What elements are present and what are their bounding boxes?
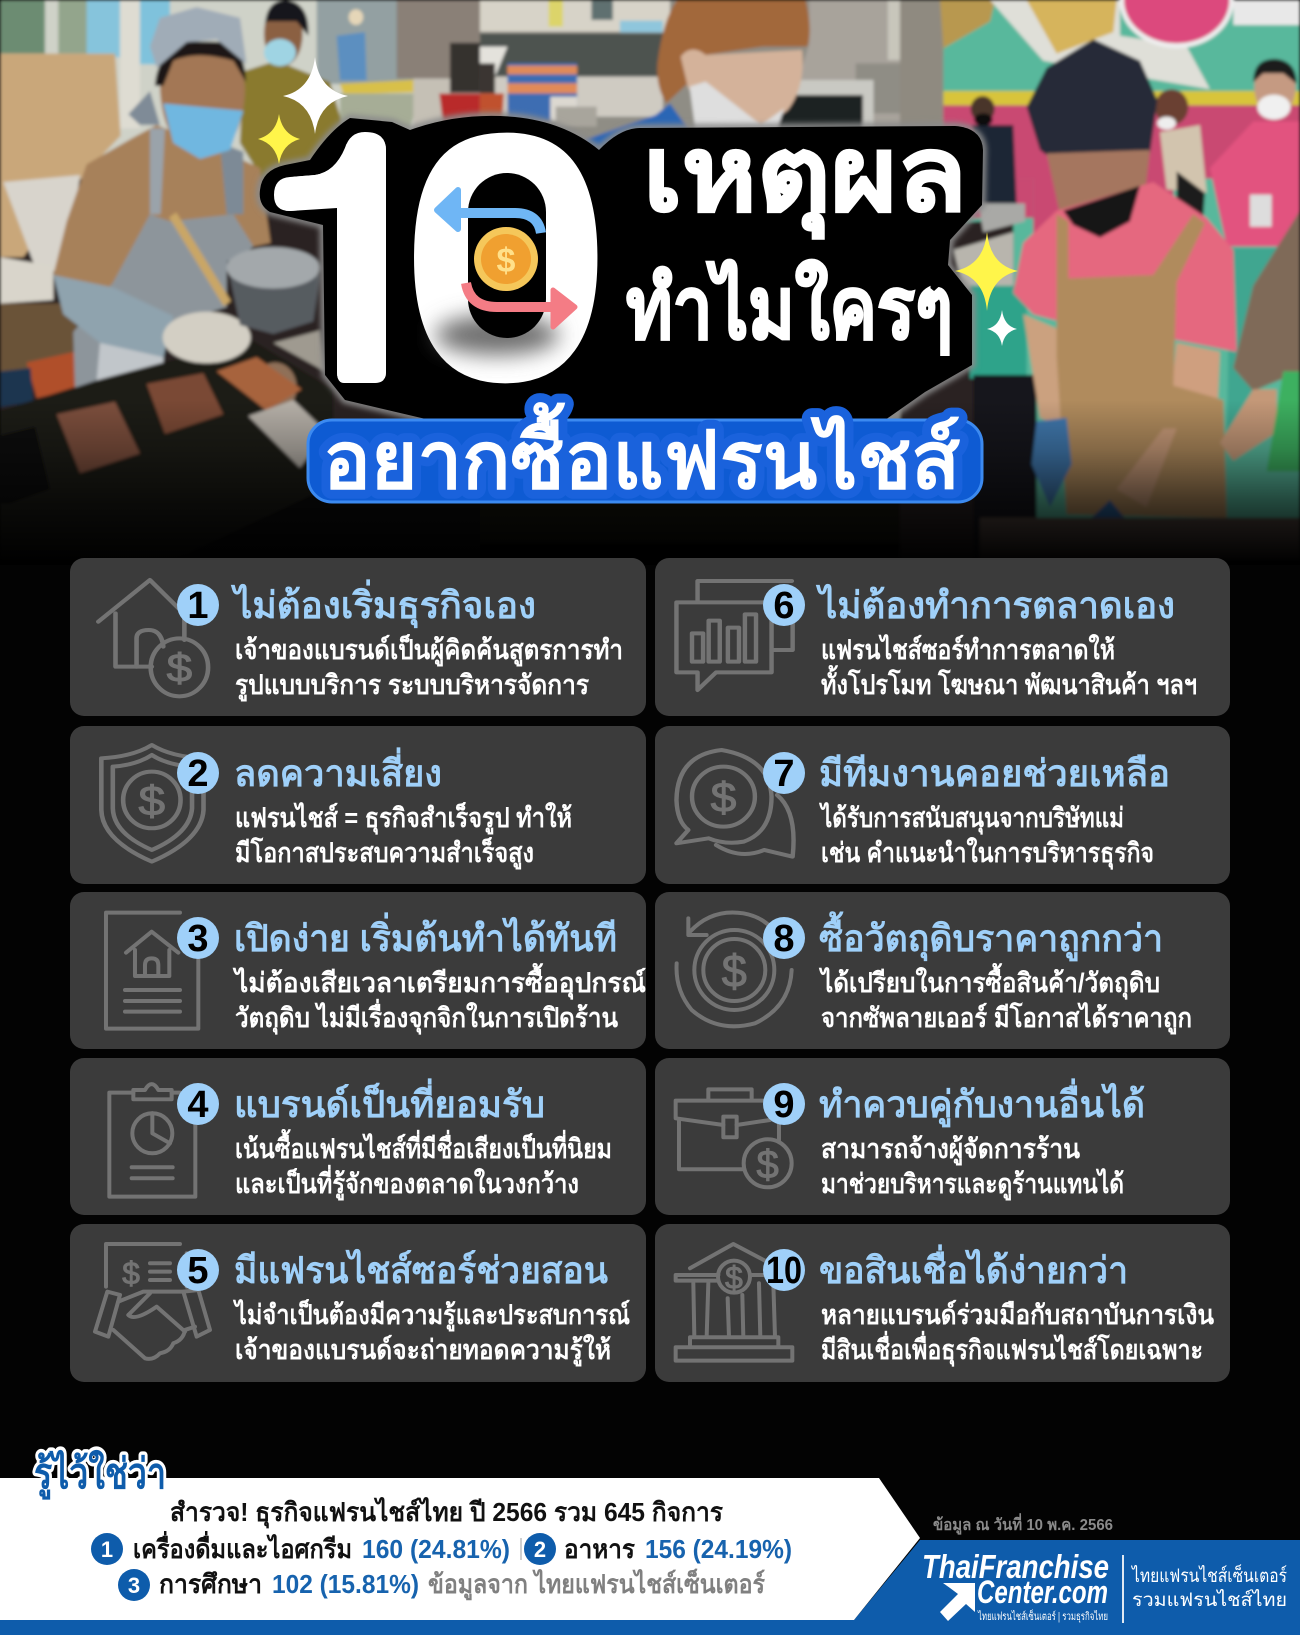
icon: shield with coin xyxy=(101,745,204,862)
body text xyxy=(819,802,1154,870)
heading: แบรนด์เป็นที่ยอมรับ xyxy=(234,1078,545,1125)
body text: ไม่จำเป็นต้องมีความรู้และประสบการณ์ xyxy=(232,1297,630,1332)
hero photo collage xyxy=(0,0,1300,560)
ranking 1: 1 xyxy=(101,1537,113,1562)
body text: ไม่ต้องเสียเวลาเตรียมการซื้ออุปกรณ์ xyxy=(232,962,646,1000)
body text xyxy=(821,634,1197,700)
ranking 1: เครื่องดื่มและไอศกรีม xyxy=(133,1530,352,1564)
body text: วัตถุดิบ ไม่มีเรื่องจุกจิกในการเปิดร้าน xyxy=(235,998,618,1035)
number badge 6 xyxy=(763,584,805,627)
icon: briefcase with coin: $ xyxy=(757,1143,779,1187)
icon: shield with coin: $ xyxy=(139,777,165,824)
icon: bank building xyxy=(676,1244,792,1361)
sparkle: yellow left xyxy=(258,114,300,164)
ranking 1 xyxy=(91,1530,510,1565)
number badge 4: 4 xyxy=(187,1084,209,1126)
logo tagline: รวมแฟรนไชส์ไทย xyxy=(1132,1589,1287,1611)
digit 0: 0 xyxy=(405,68,607,448)
panel: reason 5 xyxy=(70,1224,646,1382)
icon: house with coin: $ xyxy=(167,646,192,691)
body text xyxy=(818,962,1192,1035)
number badge 1 xyxy=(177,584,219,627)
footer blue band xyxy=(0,1540,1300,1635)
heading: ไม่ต้องเริ่มธุรกิจเอง xyxy=(230,579,536,629)
heading: มีทีมงานคอยช่วยเหลือ xyxy=(819,753,1170,794)
number badge 10: 10 xyxy=(766,1250,802,1292)
logo: ไทยแฟรนไชส์เซ็นเตอร์ | รวมธุรกิจไทย xyxy=(977,1609,1108,1623)
heading: รู้ไว้ใช่ว่า: รู้ไว้ใช่ว่า xyxy=(34,1449,166,1500)
photo: right man in pink shirt xyxy=(900,0,1300,560)
body text: แฟรนไชส์ = ธุรกิจสำเร็จรูป ทำให้ xyxy=(235,800,572,835)
body text xyxy=(821,1299,1214,1367)
sparkle: yellow right xyxy=(955,232,1018,311)
logo tagline xyxy=(1130,1563,1287,1611)
body text: เช่น คำแนะนำในการบริหารธุรกิจ xyxy=(821,837,1154,870)
title block xyxy=(254,108,990,418)
footer white panel xyxy=(0,1449,920,1620)
body text: ได้รับการสนับสนุนจากบริษัทแม่ xyxy=(819,802,1124,835)
panel: reason 3 xyxy=(70,892,646,1049)
icon: clipboard with pie chart xyxy=(109,1084,195,1197)
number badge 6: 6 xyxy=(773,585,795,627)
body text: ทั้งโปรโมท โฆษณา พัฒนาสินค้า ฯลฯ xyxy=(821,664,1197,700)
data date note: ข้อมูล ณ วันที่ 10 พ.ค. 2566 xyxy=(933,1513,1113,1536)
icon: red arrow xyxy=(466,283,575,327)
logo xyxy=(922,1548,1109,1623)
number badge 5: 5 xyxy=(187,1250,209,1292)
logo arrow xyxy=(940,1583,975,1621)
body text: รูปแบบบริการ ระบบบริหารจัดการ xyxy=(235,670,589,702)
blue banner: อยากซื้อแฟรนไชส์: อยากซื้อแฟรนไชส์ xyxy=(323,402,960,505)
heading: เหตุผล: เหตุผล xyxy=(643,117,967,239)
number badge 7 xyxy=(763,752,805,795)
body text: สามารถจ้างผู้จัดการร้าน xyxy=(821,1134,1080,1166)
icon: speech bubble with coin: $ xyxy=(711,775,736,821)
digit 1: 1 xyxy=(262,71,451,451)
heading: ทำไมใครๆ: ทำไมใครๆ xyxy=(626,259,953,357)
body text xyxy=(235,800,572,870)
body text xyxy=(232,962,646,1035)
panel: reason 10 xyxy=(655,1224,1230,1382)
icon: briefcase with coin xyxy=(676,1089,792,1187)
heading: ซื้อวัตถุดิบราคาถูกกว่า xyxy=(819,911,1163,962)
sparkle: large white xyxy=(283,57,348,134)
heading: ลดความเสี่ยง xyxy=(234,747,442,794)
digit 1 xyxy=(274,132,386,383)
ranking 3 and source: การศึกษา xyxy=(159,1569,262,1599)
number badge 8 xyxy=(763,917,805,960)
ranking 2: อาหาร xyxy=(564,1534,635,1564)
body text: เจ้าของแบรนด์จะถ่ายทอดความรู้ให้ xyxy=(235,1334,611,1367)
body text xyxy=(232,1297,630,1367)
body text: เน้นซื้อแฟรนไชส์ที่มีชื่อเสียงเป็นที่นิยม xyxy=(235,1128,612,1164)
ranking 1: 160 (24.81%) xyxy=(362,1534,510,1564)
heading: เปิดง่าย เริ่มต้นทำได้ทันที xyxy=(234,912,617,959)
ranking 3 and source: 102 (15.81%) xyxy=(272,1569,419,1599)
ranking 2: 2 xyxy=(534,1537,546,1562)
number badge 9 xyxy=(763,1083,805,1126)
number badge 8: 8 xyxy=(773,918,795,960)
icon: gold coin: $ xyxy=(497,242,516,280)
body text: มีโอกาสประสบความสำเร็จสูง xyxy=(235,835,534,870)
heading: มีแฟรนไชส์ซอร์ช่วยสอน xyxy=(234,1248,608,1291)
icon: chat chart xyxy=(676,581,793,690)
body text: ได้เปรียบในการซื้อสินค้า/วัตถุดิบ xyxy=(818,962,1160,1000)
hero fade to black xyxy=(0,400,1300,565)
body text: แฟรนไชส์ซอร์ทำการตลาดให้ xyxy=(821,634,1115,665)
panel: reason 8 xyxy=(655,892,1230,1049)
number badge 3 xyxy=(177,917,219,960)
number badge 4 xyxy=(177,1083,219,1126)
body text: หลายแบรนด์ร่วมมือกับสถาบันการเงิน xyxy=(821,1299,1214,1330)
icon: handshake and bill xyxy=(95,1244,210,1359)
icon: speech bubble with coin xyxy=(676,750,794,857)
body text: จากซัพลายเออร์ มีโอกาสได้ราคาถูก xyxy=(821,1001,1192,1035)
number badge 3: 3 xyxy=(187,918,209,960)
icon: bank building: $ xyxy=(725,1259,743,1295)
icon: house with coin xyxy=(98,580,208,696)
photo: middle woman and shop xyxy=(420,0,980,543)
survey headline: สำรวจ! ธุรกิจแฟรนไชส์ไทย ปี 2566 รวม 645 กิจการ xyxy=(170,1496,723,1529)
number badge 9: 9 xyxy=(773,1084,795,1126)
ranking 3 and source: ข้อมูลจาก ไทยแฟรนไชส์เซ็นเตอร์ xyxy=(428,1568,765,1601)
panel: reason 2 xyxy=(70,726,646,884)
logo: ThaiFranchise xyxy=(922,1548,1109,1585)
body text: มีสินเชื่อเพื่อธุรกิจแฟรนไชส์โดยเฉพาะ xyxy=(821,1330,1203,1367)
heading: ขอสินเชื่อได้ง่ายกว่า xyxy=(819,1244,1128,1291)
body text xyxy=(235,632,623,702)
panel: reason 6 xyxy=(655,558,1230,716)
icon: document with house xyxy=(106,913,198,1029)
body text xyxy=(235,1128,612,1201)
body text: มาช่วยบริหารและดูร้านแทนได้ xyxy=(821,1168,1124,1201)
icon: circular arrow coin xyxy=(677,912,792,1026)
ranking 3 and source: 3 xyxy=(128,1573,140,1598)
heading: ไม่ต้องทำการตลาดเอง xyxy=(815,583,1175,626)
body text xyxy=(821,1134,1124,1201)
ranking 2: 156 (24.19%) xyxy=(645,1534,792,1564)
icon: blue arrow xyxy=(437,190,541,233)
icon: circular arrow coin: $ xyxy=(722,946,747,997)
logo divider xyxy=(1122,1555,1124,1623)
body text: เจ้าของแบรนด์เป็นผู้คิดค้นสูตรการทำ xyxy=(235,632,623,667)
number badge 7: 7 xyxy=(773,753,795,795)
ranking 3 and source xyxy=(118,1568,765,1601)
logo: Center.com xyxy=(977,1574,1108,1610)
panel: reason 9 xyxy=(655,1058,1230,1215)
photo: left woman at griddle xyxy=(0,0,480,560)
panel: reason 4 xyxy=(70,1058,646,1215)
ranking 2 xyxy=(524,1533,792,1565)
icon: gold coin xyxy=(474,227,538,291)
icon: handshake and bill: $ xyxy=(122,1255,140,1291)
title black backing shape xyxy=(260,116,983,420)
number badge 2: 2 xyxy=(187,753,209,795)
number badge 5 xyxy=(177,1249,219,1292)
number badge 2 xyxy=(177,752,219,795)
body text: และเป็นที่รู้จักของตลาดในวงกว้าง xyxy=(235,1164,579,1201)
panel: reason 1 xyxy=(70,558,646,716)
sparkle: small white xyxy=(987,310,1017,346)
panel: reason 7 xyxy=(655,726,1230,884)
number badge 1: 1 xyxy=(187,585,209,627)
heading: ทำควบคู่กับงานอื่นได้ xyxy=(819,1078,1145,1128)
